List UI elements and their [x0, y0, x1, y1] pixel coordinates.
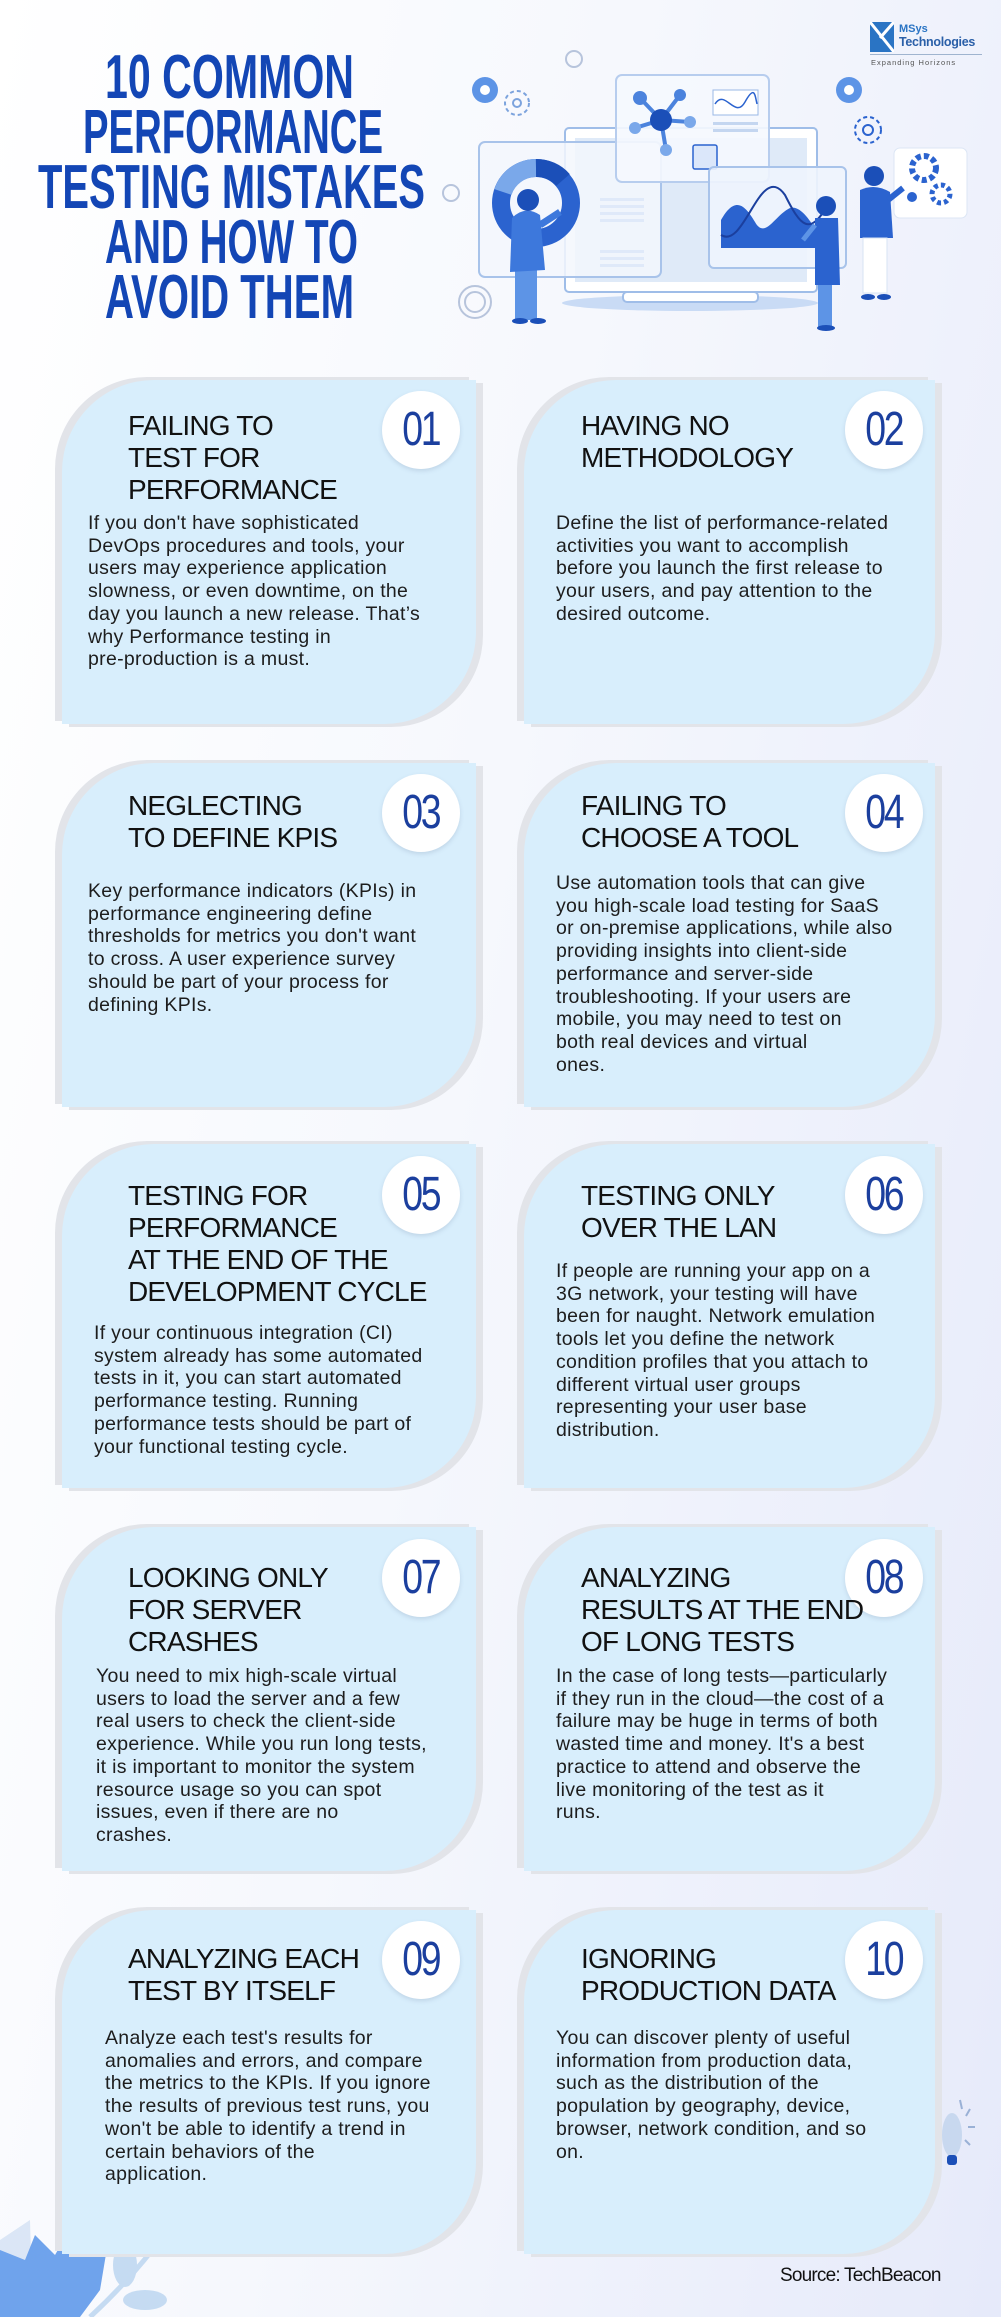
panel: network [616, 75, 769, 182]
icon: gears left [472, 77, 529, 115]
heading 10: PRODUCTION DATA [581, 1975, 836, 2006]
icon: gears right [836, 77, 881, 143]
body 01: If you don't have sophisticated [88, 512, 359, 534]
body 07: experience. While you run long tests, [96, 1733, 427, 1755]
body 08: wasted time and money. It's a best [556, 1733, 864, 1755]
number 05: 05 [403, 1168, 439, 1221]
body 10 [556, 2027, 866, 2163]
body 01: DevOps procedures and tools, your [88, 535, 405, 557]
body 06: distribution. [556, 1419, 660, 1441]
heading 06: OVER THE LAN [581, 1212, 776, 1243]
body 10: on. [556, 2141, 584, 2163]
heading 04: CHOOSE A TOOL [581, 822, 798, 853]
heading 03: NEGLECTING [128, 790, 302, 821]
logo: MSys Technologies [870, 22, 982, 67]
body 04: you high-scale load testing for SaaS [556, 895, 879, 917]
decoration: light bulb [942, 2100, 975, 2165]
card 10 [524, 1910, 935, 2254]
body 07: issues, even if there are no [96, 1801, 339, 1823]
heading 04: FAILING TO [581, 790, 726, 821]
number 02 [845, 391, 923, 469]
heading 05: PERFORMANCE [128, 1212, 337, 1243]
heading 01: PERFORMANCE [128, 474, 337, 505]
panel: donut chart [479, 142, 661, 277]
heading 01: FAILING TO [128, 410, 273, 441]
heading 08: OF LONG TESTS [581, 1626, 794, 1657]
number 06 [845, 1156, 923, 1234]
heading 01 [128, 410, 337, 505]
card 07 [62, 1527, 476, 1871]
number 07 [382, 1539, 460, 1617]
body 01: why Performance testing in [88, 626, 331, 648]
heading 07: LOOKING ONLY [128, 1562, 328, 1593]
card 08 [524, 1527, 935, 1871]
body 09 [105, 2027, 431, 2185]
body 10: such as the distribution of the [556, 2072, 819, 2094]
body 05: performance tests should be part of [94, 1413, 411, 1435]
heading 09: ANALYZING EACH [128, 1943, 359, 1974]
body 01 [88, 512, 420, 670]
heading 04 [581, 790, 798, 853]
number 04 [845, 774, 923, 852]
number 06: 06 [866, 1168, 902, 1221]
heading 02: HAVING NO [581, 410, 729, 441]
heading 06: TESTING ONLY [581, 1180, 775, 1211]
body 06: representing your user base [556, 1396, 807, 1418]
body 08: failure may be huge in terms of both [556, 1710, 878, 1732]
body 04: troubleshooting. If your users are [556, 986, 851, 1008]
number 05 [382, 1156, 460, 1234]
card 02 [524, 380, 935, 724]
heading 05: DEVELOPMENT CYCLE [128, 1276, 427, 1307]
body 06: been for naught. Network emulation [556, 1305, 875, 1327]
heading 03 [128, 790, 337, 853]
body 01: users may experience application [88, 557, 387, 579]
heading 05: TESTING FOR [128, 1180, 307, 1211]
number 08 [845, 1539, 923, 1617]
body 07 [96, 1665, 427, 1846]
body 01: day you launch a new release. That’s [88, 603, 420, 625]
body 06: 3G network, your testing will have [556, 1283, 858, 1305]
person woman [803, 196, 840, 331]
heading 08: RESULTS AT THE END [581, 1594, 863, 1625]
body 10: You can discover plenty of useful [556, 2027, 850, 2049]
card 04 [524, 763, 935, 1107]
source note: Source: TechBeacon [780, 2265, 941, 2286]
body 05: tests in it, you can start automated [94, 1367, 402, 1389]
body 05: your functional testing cycle. [94, 1436, 348, 1458]
body 08: practice to attend and observe the [556, 1756, 861, 1778]
body 03: thresholds for metrics you don't want [88, 925, 416, 947]
heading 09: TEST BY ITSELF [128, 1975, 335, 2006]
heading 05: AT THE END OF THE [128, 1244, 388, 1275]
body 08 [556, 1665, 887, 1823]
monitor [562, 128, 818, 311]
body 09: the results of previous test runs, you [105, 2095, 430, 2117]
body 08: runs. [556, 1801, 601, 1823]
body 09: anomalies and errors, and compare [105, 2050, 423, 2072]
number 10 [845, 1921, 923, 1999]
body 09: application. [105, 2163, 207, 2185]
body 02: activities you want to accomplish [556, 535, 849, 557]
number 01: 01 [403, 403, 439, 456]
decoration: bottom-left leaves [0, 2220, 167, 2317]
number 07: 07 [403, 1551, 439, 1604]
body 04: Use automation tools that can give [556, 872, 865, 894]
body 03: defining KPIs. [88, 994, 213, 1016]
body 06 [556, 1260, 875, 1441]
body 07: users to load the server and a few [96, 1688, 400, 1710]
heading 07 [128, 1562, 328, 1657]
body 03: performance engineering define [88, 903, 372, 925]
body 10: population by geography, device, [556, 2095, 850, 2117]
body 04: performance and server-side [556, 963, 813, 985]
body 04: ones. [556, 1054, 605, 1076]
body 07: resource usage so you can spot [96, 1779, 381, 1801]
body 04: mobile, you may need to test on [556, 1008, 842, 1030]
panel: wave chart [709, 167, 846, 268]
logo: MSys Technologies: MSys [899, 23, 928, 35]
body 05: performance testing. Running [94, 1390, 358, 1412]
body 03: should be part of your process for [88, 971, 389, 993]
heading 02: METHODOLOGY [581, 442, 793, 473]
number 09 [382, 1921, 460, 1999]
person right [860, 166, 903, 300]
number 01 [382, 391, 460, 469]
number 08: 08 [866, 1551, 902, 1604]
body 06: condition profiles that you attach to [556, 1351, 868, 1373]
body 03: Key performance indicators (KPIs) in [88, 880, 416, 902]
body 08: In the case of long tests—particularly [556, 1665, 887, 1687]
number 10: 10 [866, 1933, 902, 1986]
body 03: to cross. A user experience survey [88, 948, 395, 970]
heading 02 [581, 410, 794, 473]
heading 10 [581, 1943, 836, 2006]
body 06: If people are running your app on a [556, 1260, 870, 1282]
heading 05 [128, 1180, 427, 1307]
body 02: your users, and pay attention to the [556, 580, 872, 602]
card 03 [62, 763, 476, 1107]
number 02: 02 [866, 403, 902, 456]
body 02: before you launch the first release to [556, 557, 883, 579]
panel: gears right [894, 148, 967, 218]
card 05 [62, 1144, 476, 1488]
heading 01: TEST FOR [128, 442, 260, 473]
card 06 [524, 1144, 935, 1488]
body 09: certain behaviors of the [105, 2141, 315, 2163]
body 05 [94, 1322, 423, 1458]
heading 07: CRASHES [128, 1626, 258, 1657]
body 07: crashes. [96, 1824, 172, 1846]
body 03 [88, 880, 416, 1016]
heading 07: FOR SERVER [128, 1594, 302, 1625]
body 05: system already has some automated [94, 1345, 423, 1367]
body 02 [556, 512, 888, 625]
body 04: providing insights into client-side [556, 940, 847, 962]
logo: MSys Technologies: Expanding Horizons [871, 58, 956, 67]
heading 09 [128, 1943, 359, 2006]
logo: MSys Technologies: Technologies [899, 35, 975, 49]
body 05: If your continuous integration (CI) [94, 1322, 393, 1344]
number 03 [382, 774, 460, 852]
body 04: both real devices and virtual [556, 1031, 808, 1053]
heading 06 [581, 1180, 776, 1243]
body 08: live monitoring of the test as it [556, 1779, 824, 1801]
body 02: desired outcome. [556, 603, 710, 625]
body 10: information from production data, [556, 2050, 852, 2072]
heading 10: IGNORING [581, 1943, 716, 1974]
body 08: if they run in the cloud—the cost of a [556, 1688, 884, 1710]
body 02: Define the list of performance-related [556, 512, 888, 534]
body 01: pre-production is a must. [88, 648, 310, 670]
heading 03: TO DEFINE KPIS [128, 822, 337, 853]
number 09: 09 [403, 1933, 439, 1986]
body 10: browser, network condition, and so [556, 2118, 866, 2140]
body 09: won't be able to identify a trend in [105, 2118, 406, 2140]
card 01 [62, 380, 476, 724]
decorative rings [443, 51, 582, 318]
card 09 [62, 1910, 476, 2254]
body 06: tools let you define the network [556, 1328, 834, 1350]
body 06: different virtual user groups [556, 1374, 801, 1396]
heading 08: ANALYZING [581, 1562, 730, 1593]
title [38, 43, 425, 332]
number 03: 03 [403, 786, 439, 839]
heading 08 [581, 1562, 863, 1657]
number 04: 04 [866, 786, 902, 839]
illustration: header graphic [442, 50, 968, 331]
body 01: slowness, or even downtime, on the [88, 580, 408, 602]
body 07: real users to check the client-side [96, 1710, 396, 1732]
person left [510, 189, 560, 324]
body 04 [556, 872, 893, 1076]
body 07: it is important to monitor the system [96, 1756, 415, 1778]
body 04: or on-premise applications, while also [556, 917, 893, 939]
body 07: You need to mix high-scale virtual [96, 1665, 397, 1687]
body 09: the metrics to the KPIs. If you ignore [105, 2072, 431, 2094]
body 09: Analyze each test's results for [105, 2027, 373, 2049]
